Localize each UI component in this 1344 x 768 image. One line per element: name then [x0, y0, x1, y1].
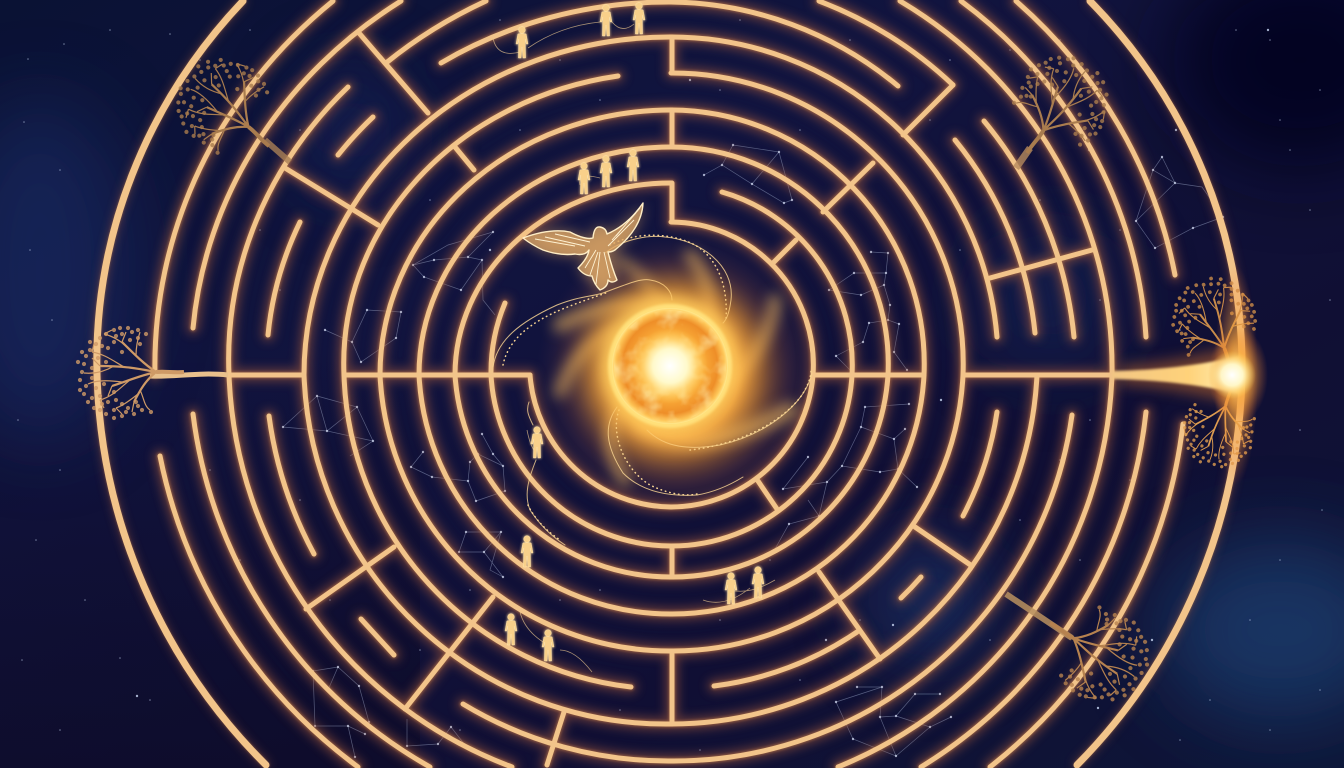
ring 9 segments	[229, 1, 1112, 767]
ring 6 segments	[344, 37, 997, 687]
constellation star points	[283, 145, 1223, 757]
threads	[493, 22, 775, 672]
tree: lower right	[1006, 584, 1164, 718]
ring 5	[380, 73, 963, 651]
radial walls	[285, 33, 1092, 765]
central warm haze	[536, 234, 816, 514]
short inner segments	[268, 117, 394, 655]
ring 7 segments	[304, 2, 1037, 724]
ring 4	[419, 110, 924, 614]
tree: upper left	[160, 42, 299, 180]
tree: left	[78, 328, 228, 418]
right flare	[1112, 265, 1268, 485]
phoenix bird	[523, 203, 643, 290]
ring 11 segments	[155, 1, 1183, 767]
ring 10 segments	[193, 1, 1146, 767]
sun swirl arms	[560, 255, 790, 480]
phoenix body	[523, 203, 643, 290]
tree: right lower	[1175, 375, 1266, 475]
phoenix glow	[523, 203, 643, 290]
constellations	[283, 145, 1223, 757]
figures glow	[505, 3, 764, 661]
ring 2	[491, 192, 852, 546]
figures	[505, 3, 764, 661]
horizontal axis walls	[229, 374, 1112, 376]
dotted energy trails	[493, 235, 812, 545]
tree: upper right	[990, 40, 1125, 179]
ring 1 innermost	[530, 222, 813, 507]
ring 8 segments	[386, 1, 1074, 761]
phoenix feathers	[535, 208, 640, 284]
tree: right upper	[1163, 269, 1270, 385]
people and connecting threads	[493, 3, 775, 672]
central sun	[586, 282, 754, 450]
ring 3	[455, 147, 888, 577]
